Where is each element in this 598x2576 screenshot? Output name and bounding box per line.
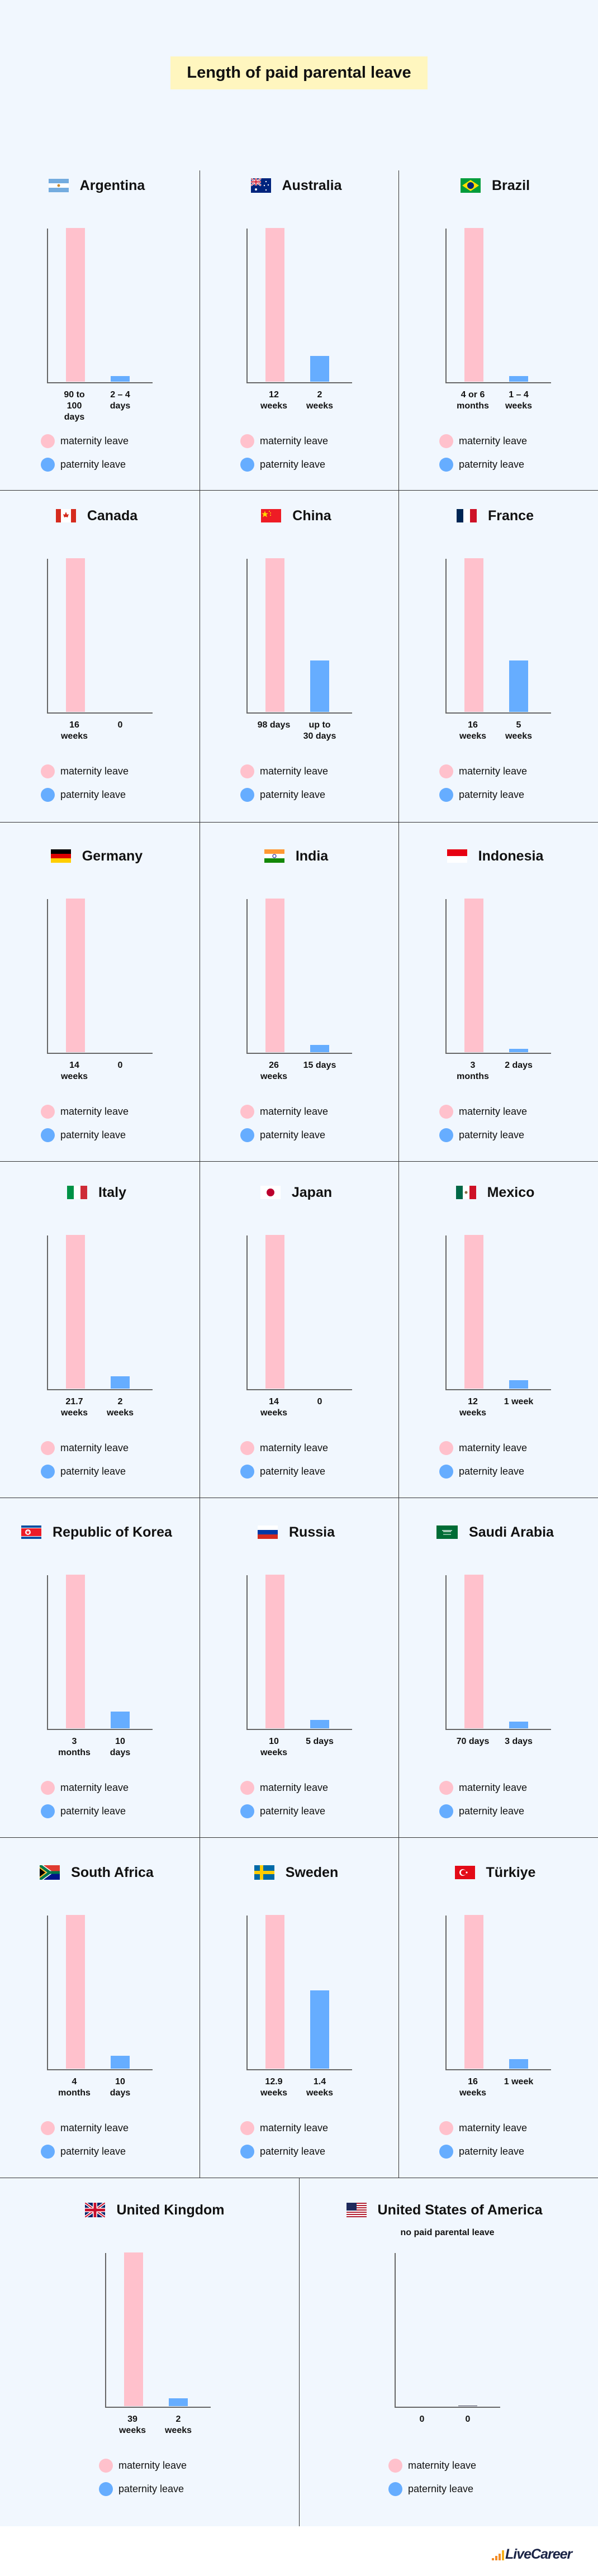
heading: India: India (296, 848, 328, 864)
panel: France (439, 507, 551, 802)
legend: maternity leave (60, 1106, 129, 1117)
value labels: months (457, 1072, 489, 1081)
value labels (0, 1736, 200, 1771)
value labels (0, 1396, 200, 1431)
value labels: weeks (165, 2426, 192, 2435)
heading: Sweden: Sweden (286, 1864, 338, 1880)
legend (41, 764, 129, 802)
panel: Mexico (398, 1170, 598, 1482)
value labels: 2 (176, 2415, 181, 2424)
value labels: weeks (306, 401, 333, 411)
legend (439, 434, 527, 472)
legend (99, 2459, 233, 2497)
heading: Canada (56, 507, 137, 523)
value labels: days (110, 2088, 130, 2098)
logo: LiveCareer: LiveCareer (505, 2546, 572, 2562)
heading: Germany (51, 848, 143, 864)
legend: maternity leave (408, 2460, 476, 2471)
heading: United States of America: United States of America (378, 2202, 542, 2217)
panel: Italy (0, 1170, 200, 1482)
legend: paternity leave (60, 459, 126, 470)
heading: Argentina (49, 178, 145, 193)
legend: paternity leave (60, 2146, 126, 2157)
bar chart (47, 1914, 153, 2070)
bar chart (445, 228, 551, 383)
bar chart (47, 899, 153, 1054)
legend (439, 764, 527, 802)
value labels: days (110, 1748, 130, 1757)
heading: Japan: Japan (292, 1185, 332, 1200)
bar chart (445, 1234, 552, 1390)
legend: paternity leave (260, 789, 325, 800)
legend (41, 1441, 175, 1479)
bar chart (445, 897, 552, 1053)
value labels: 1 week (504, 2077, 533, 2087)
value labels: 10 (269, 1737, 279, 1746)
heading: France: France (488, 507, 534, 523)
legend: maternity leave (260, 1442, 328, 1453)
bar chart (445, 1914, 552, 2070)
legend: maternity leave (60, 435, 129, 446)
value labels (200, 2076, 399, 2111)
value labels: 4 (72, 2077, 77, 2087)
legend (439, 2121, 573, 2159)
value labels (398, 1396, 598, 1431)
value labels: weeks (260, 2088, 287, 2098)
value labels: 4 or 6 (461, 390, 485, 400)
value labels: 16 (69, 720, 79, 730)
legend: paternity leave (260, 1129, 325, 1140)
bar chart (445, 1574, 552, 1729)
value labels: weeks (61, 731, 88, 741)
value labels (348, 2414, 547, 2449)
value labels: weeks (260, 1748, 287, 1757)
heading: Russia: Russia (289, 1524, 335, 1540)
panel: Canada (41, 507, 153, 802)
heading: Indonesia (398, 848, 592, 864)
heading: United Kingdom: United Kingdom (116, 2202, 225, 2217)
legend (41, 2121, 175, 2159)
value labels: 16 (468, 720, 478, 730)
legend: maternity leave (459, 435, 527, 446)
heading: Republic of Korea (0, 1524, 193, 1540)
value labels (258, 720, 336, 741)
value labels: weeks (459, 1408, 486, 1418)
value labels: months (457, 401, 489, 411)
value labels: 14 (69, 1061, 79, 1070)
value labels: 12 (269, 390, 279, 400)
legend: paternity leave (459, 2146, 524, 2157)
panel: Argentina (41, 178, 153, 472)
value labels (260, 1061, 336, 1081)
legend: maternity leave (60, 2122, 129, 2133)
panel: Brazil (439, 178, 551, 472)
value labels (58, 2414, 258, 2449)
legend: maternity leave (60, 1782, 129, 1793)
heading: China (261, 507, 331, 523)
value labels: 1.4 (314, 2077, 326, 2087)
legend: maternity leave (459, 2122, 527, 2133)
value labels: 3 (72, 1737, 77, 1746)
heading: Argentina: Argentina (80, 178, 145, 193)
legend: paternity leave (60, 1466, 126, 1477)
value labels: days (110, 401, 130, 411)
heading: France (457, 507, 534, 523)
panel: United Kingdom (58, 2187, 258, 2500)
legend (240, 1105, 328, 1142)
value labels: months (58, 1748, 91, 1757)
legend: paternity leave (260, 459, 325, 470)
value labels: weeks (260, 1408, 287, 1418)
heading: China: China (292, 507, 331, 523)
heading: India (264, 848, 329, 864)
legend: paternity leave (118, 2483, 184, 2494)
panel: Saudi Arabia (398, 1509, 598, 1822)
legend: maternity leave (459, 1782, 527, 1793)
heading: Türkiye (398, 1865, 592, 1880)
legend: paternity leave (260, 2146, 325, 2157)
value labels: 3 (471, 1061, 475, 1070)
value labels: 12 (468, 1397, 478, 1406)
heading: Russia (200, 1524, 393, 1540)
title (170, 56, 428, 89)
heading: Mexico (398, 1185, 592, 1200)
heading: Canada: Canada (87, 507, 137, 523)
heading: Italy: Italy (98, 1185, 126, 1200)
value labels (61, 1061, 122, 1081)
heading: Brazil: Brazil (492, 178, 530, 193)
value labels: months (58, 2088, 91, 2098)
value labels: weeks (260, 401, 287, 411)
value labels: 2 – 4 (110, 390, 130, 400)
heading: South Africa: South Africa (71, 1864, 154, 1880)
legend: paternity leave (60, 1805, 126, 1817)
bar chart (246, 228, 352, 383)
value labels: 2 (317, 390, 322, 400)
heading: Saudi Arabia (398, 1524, 592, 1540)
legend (41, 1781, 175, 1819)
heading: Saudi Arabia: Saudi Arabia (469, 1524, 554, 1540)
bar chart (246, 1574, 353, 1729)
value labels: 14 (269, 1397, 279, 1406)
bar chart (246, 558, 352, 714)
value labels: 10 (115, 1737, 125, 1746)
legend: maternity leave (260, 435, 328, 446)
value labels: 2 (118, 1397, 122, 1406)
heading: Japan (200, 1185, 393, 1200)
bar chart (47, 1574, 153, 1729)
panel: Japan (200, 1170, 399, 1482)
panel: United States of America (348, 2187, 547, 2500)
legend: paternity leave (60, 1129, 126, 1140)
panel: South Africa (0, 1850, 200, 2162)
legend: paternity leave (260, 1805, 325, 1817)
value labels: weeks (61, 1408, 88, 1418)
legend: maternity leave (459, 766, 527, 777)
value labels: 5 days (306, 1737, 334, 1746)
legend: maternity leave (260, 2122, 328, 2133)
legend (240, 434, 328, 472)
legend: paternity leave (60, 789, 126, 800)
legend (41, 434, 129, 472)
legend: paternity leave (459, 789, 524, 800)
bar chart (47, 228, 153, 383)
value labels: 0 (420, 2415, 424, 2424)
legend (439, 1441, 573, 1479)
panel: Sweden (200, 1850, 399, 2162)
value labels: 3 days (505, 1737, 533, 1746)
bar chart (246, 1914, 353, 2070)
value labels (0, 2076, 200, 2111)
heading: Sweden (200, 1865, 393, 1880)
value labels (200, 1736, 399, 1771)
legend: paternity leave (408, 2483, 473, 2494)
legend: paternity leave (459, 1805, 524, 1817)
legend (439, 1105, 573, 1143)
legend (240, 1781, 374, 1819)
value labels: weeks (505, 401, 532, 411)
value labels: 0 (118, 1061, 122, 1070)
value labels: 1 week (504, 1397, 533, 1406)
value labels: 12.9 (265, 2077, 283, 2087)
value labels: 0 (466, 2415, 470, 2424)
legend: maternity leave (118, 2460, 187, 2471)
legend: maternity leave (459, 1106, 527, 1117)
value labels: 0 (118, 720, 122, 730)
legend (388, 2459, 523, 2497)
value labels: 30 days (303, 731, 336, 741)
legend: maternity leave (260, 1782, 328, 1793)
value labels: 26 (269, 1061, 279, 1070)
legend: maternity leave (260, 1106, 328, 1117)
value labels: 1 – 4 (509, 390, 529, 400)
panel: Australia (240, 178, 352, 472)
value labels (200, 1396, 399, 1431)
bar chart (246, 899, 352, 1054)
subtitle: no paid parental leave: no paid parental leave (400, 2228, 495, 2237)
legend (240, 2121, 374, 2159)
legend (439, 1781, 573, 1819)
panel: Republic of Korea (0, 1509, 200, 1822)
heading: Mexico: Mexico (487, 1185, 534, 1200)
legend: maternity leave (260, 766, 328, 777)
bar chart (445, 558, 551, 714)
value labels: 10 (115, 2077, 125, 2087)
title: Length of paid parental leave (187, 64, 411, 82)
legend: paternity leave (459, 459, 524, 470)
panel: Türkiye (398, 1850, 598, 2162)
heading: Germany: Germany (82, 848, 143, 864)
value labels: weeks (505, 731, 532, 741)
value labels: 16 (468, 2077, 478, 2087)
panel: Germany (41, 848, 153, 1142)
value labels (61, 720, 122, 741)
value labels: 70 days (457, 1737, 489, 1746)
heading: Australia: Australia (282, 178, 341, 193)
value labels: 0 (317, 1397, 322, 1406)
panel: India (240, 848, 352, 1142)
legend: maternity leave (60, 766, 129, 777)
heading: Brazil (461, 178, 530, 193)
value labels: weeks (119, 2426, 146, 2435)
heading: South Africa (0, 1865, 193, 1880)
value labels (398, 2076, 598, 2111)
heading: Italy (0, 1185, 193, 1200)
panel: China (240, 507, 352, 802)
value labels: weeks (107, 1408, 134, 1418)
value labels: weeks (459, 731, 486, 741)
value labels: 5 (516, 720, 521, 730)
value labels (398, 1736, 598, 1771)
heading: Australia (251, 178, 342, 193)
value labels: up to (309, 720, 331, 730)
value labels: weeks (61, 1072, 88, 1081)
legend: maternity leave (60, 1442, 129, 1453)
legend: maternity leave (459, 1442, 527, 1453)
heading: United Kingdom (58, 2202, 251, 2218)
panel: Russia (200, 1509, 399, 1822)
value labels: 21.7 (65, 1397, 83, 1406)
value labels: weeks (459, 2088, 486, 2098)
value labels (457, 390, 532, 411)
legend (240, 764, 328, 802)
bar chart (47, 558, 153, 714)
bar chart (246, 1234, 353, 1390)
value labels: 2 days (505, 1061, 533, 1070)
legend: paternity leave (260, 1466, 325, 1477)
panel: Indonesia (398, 833, 598, 1146)
bar chart (395, 2251, 501, 2407)
value labels (398, 1060, 598, 1095)
value labels: 98 days (258, 720, 290, 730)
legend: paternity leave (459, 1129, 524, 1140)
bar chart (47, 1234, 153, 1390)
logo: LiveCareer (492, 2544, 581, 2561)
value labels: 39 (127, 2415, 137, 2424)
heading: Republic of Korea: Republic of Korea (53, 1524, 172, 1540)
legend: paternity leave (459, 1466, 524, 1477)
value labels: weeks (306, 2088, 333, 2098)
value labels: days (64, 412, 84, 422)
value labels (459, 720, 532, 741)
heading: Indonesia: Indonesia (478, 848, 543, 864)
value labels: weeks (260, 1072, 287, 1081)
heading: Türkiye: Türkiye (486, 1864, 535, 1880)
legend (41, 1105, 129, 1142)
value labels: 100 (67, 401, 82, 411)
legend (240, 1441, 374, 1479)
value labels: 15 days (303, 1061, 336, 1070)
value labels (260, 390, 333, 411)
value labels: 90 to (64, 390, 85, 400)
bar chart (105, 2251, 211, 2407)
value labels (64, 390, 130, 422)
